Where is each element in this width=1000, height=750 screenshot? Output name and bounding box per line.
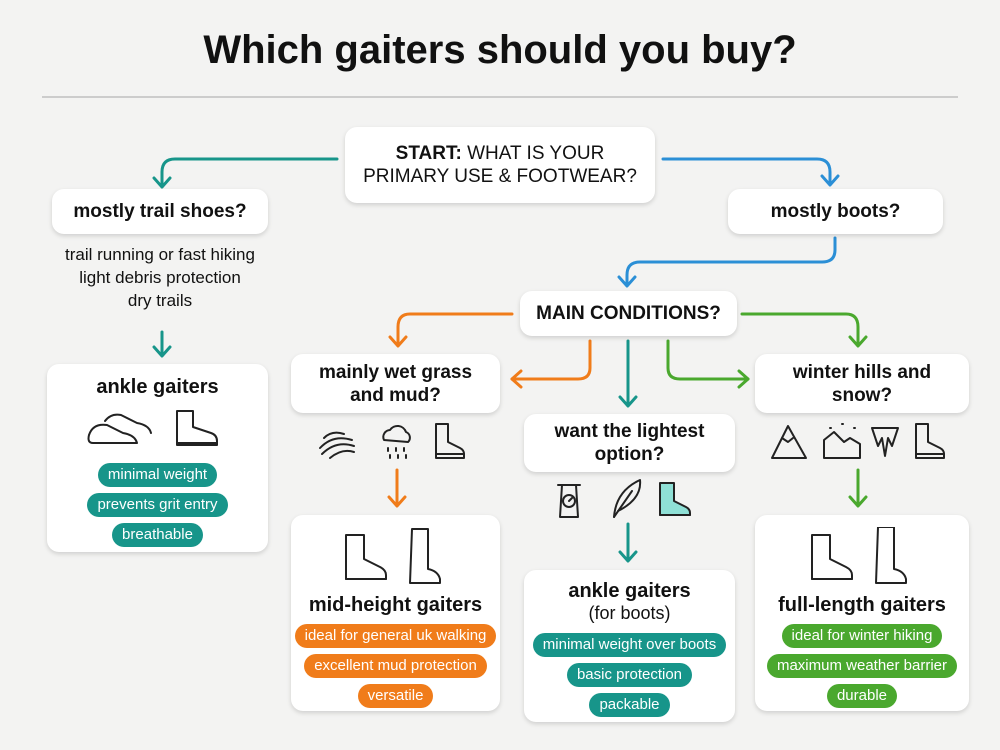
feature pills: basic protection [577, 666, 682, 683]
icons: boot and gaiter [345, 528, 441, 584]
question: main conditions [520, 291, 737, 336]
heading: full-length gaiters [778, 594, 946, 616]
feature pills [533, 633, 726, 717]
question: winter [755, 354, 969, 413]
start box [345, 127, 655, 203]
text: trail shoes notes [65, 245, 255, 310]
icons: lightest [557, 479, 691, 518]
feature pills: prevents grit entry [97, 496, 218, 513]
heading [568, 580, 691, 623]
text: trail shoes notes: light debris protection [79, 268, 241, 287]
question: mostly boots: mostly boots? [771, 201, 900, 222]
question: wet grass [291, 354, 500, 413]
heading: (for boots) [588, 603, 671, 623]
title: Which gaiters should you buy? [203, 28, 797, 72]
question: wet grass: and mud? [350, 384, 441, 406]
panel: ankle gaiters (trail shoes) [47, 364, 268, 552]
feature pills: minimal weight [108, 466, 207, 483]
heading: ankle gaiters [568, 580, 691, 602]
panel: full-length gaiters [755, 515, 969, 711]
feature pills: ideal for general uk walking [305, 627, 486, 644]
feature pills: ideal for winter hiking [792, 627, 932, 644]
question: winter: winter hills and [793, 362, 931, 382]
start box: START: WHAT IS YOUR [396, 143, 604, 164]
question: main conditions: MAIN CONDITIONS? [536, 303, 721, 324]
icons: wet grass [319, 423, 465, 459]
question: mostly trail shoes: mostly trail shoes? [73, 201, 247, 222]
feature pills: minimal weight over boots [543, 636, 716, 653]
heading: mid-height gaiters [309, 594, 482, 616]
feature pills: versatile [368, 687, 423, 704]
question: winter: snow? [832, 384, 892, 406]
question: mostly trail shoes [52, 189, 268, 234]
feature pills: packable [599, 696, 660, 713]
heading: ankle gaiters [96, 376, 219, 398]
feature pills: durable [837, 687, 887, 704]
icons: shoes and gaiter [88, 410, 218, 446]
feature pills [767, 624, 957, 708]
feature pills: maximum weather barrier [777, 657, 947, 674]
panel: mid-height gaiters [291, 515, 500, 711]
icons: boot and gaiter [811, 527, 907, 584]
question: lightest: want the lightest [555, 421, 704, 442]
start box: PRIMARY USE & FOOTWEAR? [363, 166, 637, 187]
question: mostly boots [728, 189, 943, 234]
feature pills [87, 463, 228, 547]
feature pills: breathable [122, 526, 193, 543]
question: lightest: option? [595, 444, 664, 465]
feature pills: excellent mud protection [314, 657, 477, 674]
question: wet grass: mainly wet grass [319, 362, 472, 382]
icons: winter [771, 423, 945, 459]
panel: ankle gaiters for boots [524, 570, 735, 722]
text: trail shoes notes: trail running or fast hiking [65, 245, 255, 264]
question: lightest [524, 414, 735, 472]
text: trail shoes notes: dry trails [128, 291, 192, 310]
feature pills [295, 624, 496, 708]
